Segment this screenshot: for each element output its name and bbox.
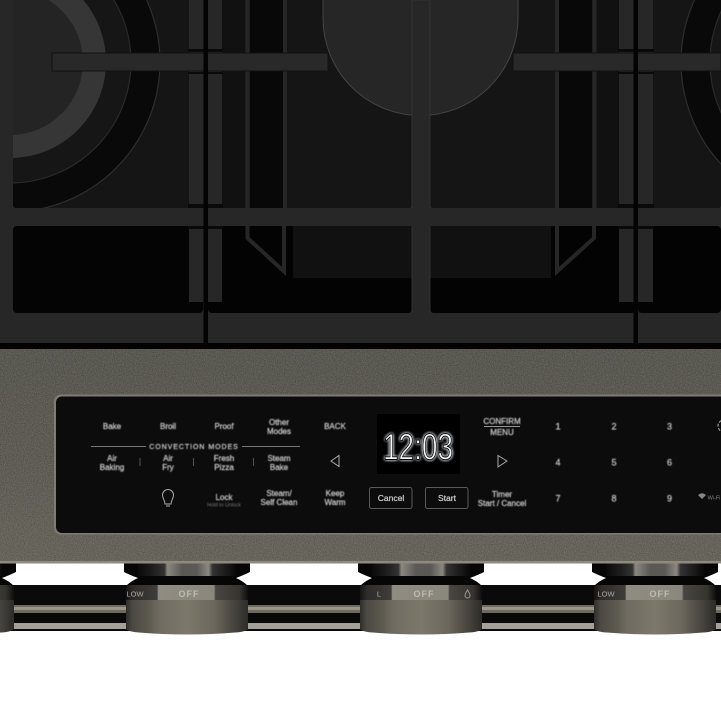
grate shadows: [188, 49, 654, 229]
number pad: 3: [667, 422, 672, 432]
right arrow: [498, 456, 507, 467]
icon: settings gear: [718, 420, 721, 432]
start button: [426, 488, 468, 508]
wifi label: [698, 493, 720, 502]
knobs and rail: [0, 563, 721, 634]
rail: [0, 585, 721, 631]
cooktop: [0, 0, 721, 349]
knob 2: [358, 563, 484, 634]
mode labels: Air: [163, 454, 173, 463]
mode labels: CONFIRM: [483, 417, 521, 426]
mode labels: Start / Cancel: [478, 499, 526, 508]
number pad: 8: [611, 494, 617, 504]
number pad: 4: [555, 458, 561, 468]
cancel button: [370, 488, 412, 508]
mode labels: Modes: [267, 427, 291, 436]
mode labels: Warm: [324, 498, 346, 507]
knob 1: OFF: [178, 589, 200, 599]
knob 1: [124, 563, 250, 634]
control panel: [54, 394, 721, 534]
number pad: [555, 422, 672, 504]
mode labels: [100, 417, 526, 508]
mode labels: Bake: [103, 422, 122, 431]
left burner: [0, 0, 160, 212]
wifi label: Wi-Fi: [708, 496, 720, 502]
mode labels: Keep: [326, 489, 345, 498]
start button: Start: [438, 493, 457, 503]
mode labels: Steam: [267, 454, 291, 463]
number pad: 6: [667, 458, 672, 468]
knob partial left: [0, 563, 16, 634]
knob 2: OFF: [414, 589, 434, 599]
cancel button: Cancel: [378, 493, 404, 503]
mode labels: Bake: [270, 463, 289, 472]
knob 3: LOW: [597, 590, 615, 598]
mode labels: Air: [107, 454, 117, 463]
knob 1: LOW: [126, 590, 144, 598]
display: 12:03: [383, 426, 453, 468]
number pad: 7: [555, 494, 561, 504]
mode labels: Proof: [214, 422, 234, 431]
upper left cell: [13, 0, 412, 208]
mode labels: Self Clean: [261, 498, 297, 507]
mode labels: Timer: [492, 490, 512, 499]
number pad: 5: [611, 458, 617, 468]
lower cells: [13, 226, 721, 313]
mode labels: Hold to Unlock: [207, 502, 241, 508]
grate seams: [0, 0, 721, 349]
upper right cell: [430, 0, 721, 208]
display: [377, 414, 460, 474]
icon: light bulb: [162, 490, 174, 506]
stone control band: [0, 349, 721, 564]
convection lines: [91, 426, 520, 466]
grate cross bars: [52, 53, 721, 71]
mode labels: Lock: [216, 493, 233, 502]
mode labels: Steam/: [266, 489, 292, 498]
mode labels: Broil: [160, 422, 176, 431]
right burner: [680, 0, 721, 164]
mode labels: CONVECTION MODES: [149, 444, 239, 451]
center burner: [323, 0, 518, 116]
mode labels: Fry: [162, 463, 174, 472]
number pad: 1: [555, 422, 561, 432]
mode labels: Other: [269, 418, 289, 427]
mode labels: Pizza: [214, 463, 234, 472]
grate bars: [0, 0, 721, 343]
knob 3: [592, 563, 718, 634]
mode labels: MENU: [490, 428, 514, 437]
number pad: 2: [611, 422, 617, 432]
number pad: 9: [667, 494, 672, 504]
grate thin rails: [248, 0, 594, 272]
mode labels: BACK: [324, 422, 347, 431]
mode labels: Baking: [100, 463, 124, 472]
mode labels: Fresh: [214, 454, 234, 463]
left arrow: [331, 456, 339, 466]
knob 2: L: [377, 590, 381, 598]
knob 3: OFF: [650, 589, 670, 599]
